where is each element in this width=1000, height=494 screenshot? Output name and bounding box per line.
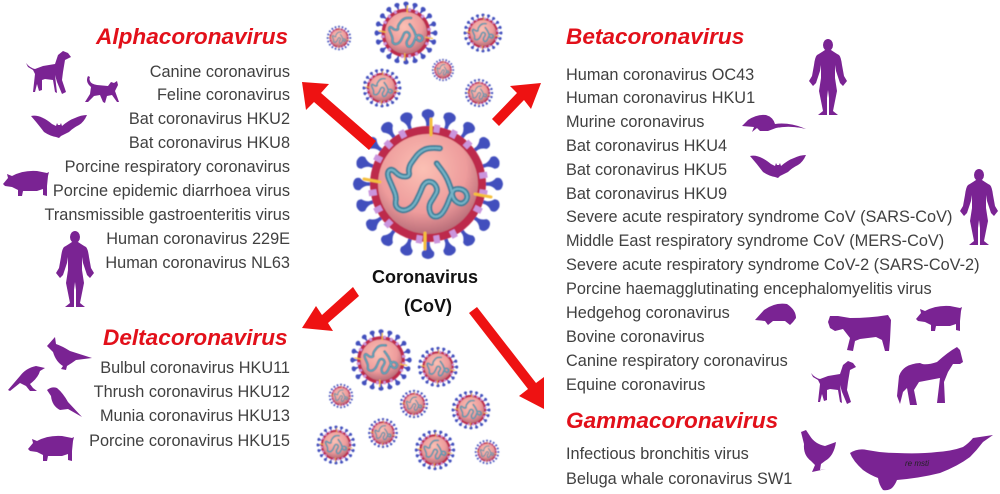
text block: Betacoronavirus species: Human coronavirus OC43 [566,66,754,84]
icon: bat [31,115,87,138]
text block: Alphacoronavirus species: Canine coronavirus [150,63,290,81]
icon: pig [3,171,49,196]
icon: cow [828,315,891,351]
arrow: to Gammacoronavirus [469,307,544,409]
text block: Alphacoronavirus species [44,63,290,272]
heading: Alphacoronavirus: Alphacoronavirus [95,24,288,49]
text block: Gammacoronavirus species: Beluga whale coronavirus SW1 [566,470,792,488]
text block: Betacoronavirus species: Severe acute respiratory syndrome CoV (SARS-CoV) [566,208,952,226]
central label: Coronavirus (CoV): Coronavirus [372,267,478,287]
arrow: to Betacoronavirus [492,83,541,126]
text block: Betacoronavirus species: Bovine coronavirus [566,328,704,346]
virus cluster: bottom [316,329,499,470]
text block: Betacoronavirus species: Murine coronavirus [566,113,704,131]
text block: Betacoronavirus species: Bat coronavirus HKU5 [566,161,727,179]
icon: cat [85,76,119,103]
icon: hedgehog [755,304,796,325]
icon: rat [742,115,806,132]
text block: Betacoronavirus species: Equine coronavirus [566,376,705,394]
icon: munia bird [47,387,82,417]
text block: Alphacoronavirus species: Porcine respiratory coronavirus [65,158,290,176]
icon: bat [750,155,806,178]
text block: Betacoronavirus species: Human coronavirus HKU1 [566,89,755,107]
main coronavirus illustration [353,109,503,259]
icon: chicken [801,430,836,472]
text block: Alphacoronavirus species: Human coronavirus NL63 [105,254,290,272]
icon: human [56,231,94,307]
text block: Deltacoronavirus species: Munia coronavirus HKU13 [100,407,290,425]
icon: beluga whale: re msti [905,459,929,468]
icon: human [809,39,847,115]
icon: pig [28,436,74,461]
heading: Betacoronavirus: Betacoronavirus [566,24,744,49]
text block: Betacoronavirus species: Hedgehog coronavirus [566,304,730,322]
icon: beluga whale [850,435,993,490]
heading: Deltacoronavirus: Deltacoronavirus [103,325,288,350]
text block: Deltacoronavirus species: Thrush coronavirus HKU12 [94,383,290,401]
text block: Deltacoronavirus species [89,359,290,450]
icon: dog [26,51,71,94]
virus cluster: top [327,1,502,107]
text block: Alphacoronavirus species: Human coronavirus 229E [106,230,290,248]
text block: Betacoronavirus species [566,66,980,394]
icon: dog [811,361,856,404]
text block: Alphacoronavirus species: Feline coronavirus [157,86,290,104]
text block: Betacoronavirus species: Middle East respiratory syndrome CoV (MERS-CoV) [566,232,944,250]
text block: Alphacoronavirus species: Transmissible gastroenteritis virus [44,206,290,224]
heading: Gammacoronavirus: Gammacoronavirus [566,408,778,433]
arrow: to Alphacoronavirus [302,82,376,150]
text block: Betacoronavirus species: Porcine haemagglutinating encephalomyelitis virus [566,280,932,298]
icon: perched bird [8,366,45,391]
text block: Deltacoronavirus species: Bulbul coronavirus HKU11 [100,359,290,377]
central label: Coronavirus (CoV) [372,267,478,316]
icon: horse [897,347,963,405]
text block: Gammacoronavirus species [566,445,792,488]
text block: Alphacoronavirus species: Bat coronavirus HKU2 [129,110,290,128]
icon: human [960,169,998,245]
text block: Betacoronavirus species: Bat coronavirus HKU9 [566,185,727,203]
arrow: to Deltacoronavirus [302,287,359,331]
text block: Gammacoronavirus species: Infectious bronchitis virus [566,445,749,463]
text block: Alphacoronavirus species: Porcine epidemic diarrhoea virus [53,182,290,200]
text block: Betacoronavirus species: Severe acute respiratory syndrome CoV-2 (SARS-CoV-2) [566,256,980,274]
text block: Alphacoronavirus species: Bat coronavirus HKU8 [129,134,290,152]
text block: Betacoronavirus species: Bat coronavirus HKU4 [566,137,727,155]
text block: Deltacoronavirus species: Porcine coronavirus HKU15 [89,432,290,450]
icon: cardinal bird [47,337,92,370]
icon: pig [916,306,962,331]
central label: Coronavirus (CoV): (CoV) [404,296,452,316]
text block: Betacoronavirus species: Canine respiratory coronavirus [566,352,788,370]
